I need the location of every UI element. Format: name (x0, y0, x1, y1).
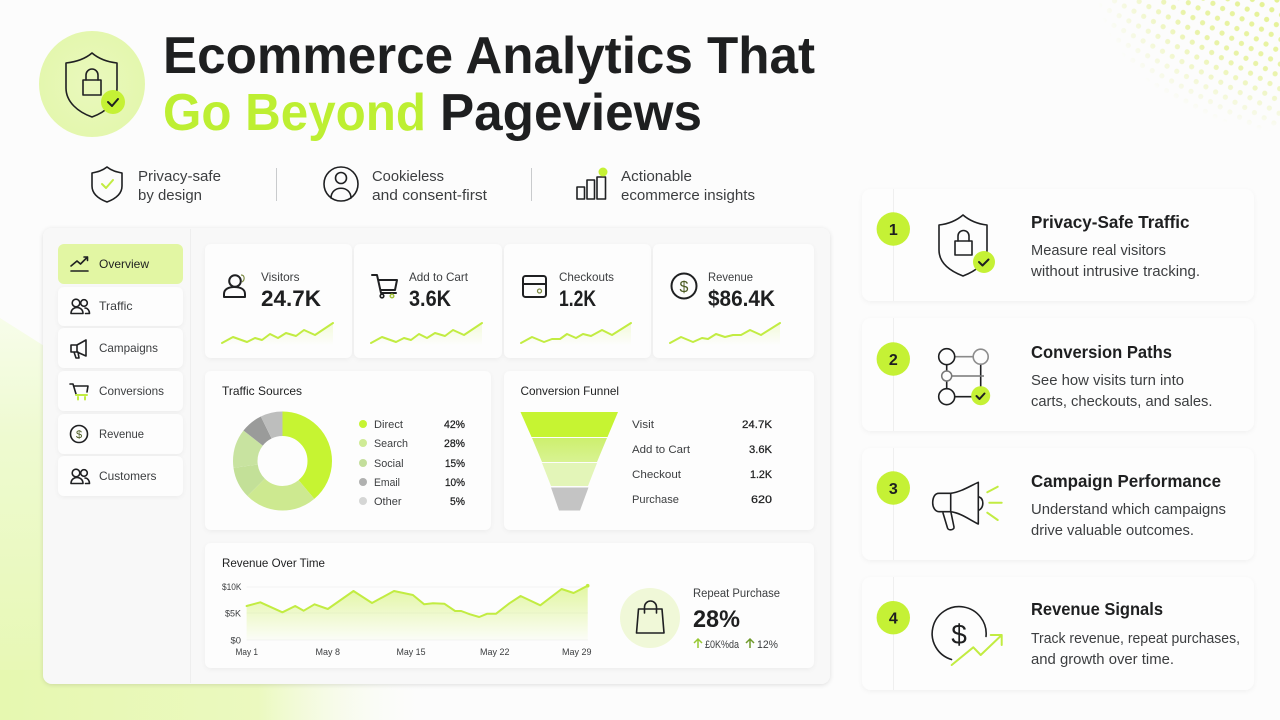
dashboard panel (43, 189, 1254, 690)
nav: revenue: $ (76, 429, 82, 441)
title: Go Beyond (163, 84, 426, 142)
donut legend: 10% (445, 477, 465, 489)
KPI card: revenue: Revenue (708, 270, 753, 284)
title: Ecommerce Analytics That (163, 27, 815, 85)
KPI card: visitors: 24.7K (261, 286, 321, 311)
panel: conversion funnel (504, 371, 814, 530)
header badge: shield with lock (39, 31, 145, 137)
funnel labels: Add to Cart (632, 444, 690, 456)
card 2: conversion paths: carts, checkouts, and sales. (1031, 394, 1212, 410)
KPI card: add to cart: 3.6K (409, 286, 451, 311)
funnel labels: Visit (632, 419, 654, 431)
nav: conversions (58, 371, 183, 411)
KPI card: visitors: Visitors (261, 270, 300, 284)
card 2: conversion paths: Conversion Paths (1031, 342, 1172, 362)
feature: actionable (577, 168, 755, 204)
card 4: revenue signals: and growth over time. (1031, 652, 1174, 668)
nav: overview (58, 244, 183, 284)
nav: revenue: Revenue (99, 427, 144, 441)
donut legend: 15% (445, 458, 465, 470)
KPI card: checkouts (504, 244, 651, 358)
KPI card: checkouts: Checkouts (559, 270, 614, 284)
card 1: privacy-safe traffic: without intrusive tracking. (1030, 264, 1200, 280)
funnel labels: 3.6K (749, 444, 773, 456)
KPI card: revenue (653, 244, 814, 358)
repeat purchase stat: Repeat Purchase (693, 588, 780, 600)
halftone dot pattern (1108, 0, 1280, 126)
nav: overview: Overview (99, 257, 149, 271)
repeat purchase stat: £0K%da (705, 639, 740, 651)
card 2: conversion paths: 2 (889, 352, 898, 369)
sidebar nav (58, 244, 183, 496)
funnel labels: 24.7K (742, 419, 773, 431)
area chart: May 29 (562, 647, 592, 658)
nav: campaigns: Campaigns (99, 341, 158, 355)
nav: conversions: Conversions (99, 384, 164, 398)
card 3: campaign performance: Understand which campaigns (1031, 502, 1226, 518)
feature: cookieless (324, 167, 488, 204)
area chart: $5K (225, 608, 242, 620)
nav: customers: Customers (99, 469, 156, 483)
feature: actionable: ecommerce insights (621, 187, 755, 204)
card 3: campaign performance (862, 448, 1254, 560)
card 4: revenue signals: Track revenue, repeat purchases, (1031, 631, 1240, 647)
donut legend: Other (374, 496, 402, 508)
card 4: revenue signals (862, 577, 1254, 690)
area chart: $0 (230, 636, 241, 646)
card 3: campaign performance: Campaign Performance (1031, 471, 1221, 491)
KPI card: add to cart: Add to Cart (409, 270, 469, 284)
card 1: privacy-safe traffic: Measure real visitors (1031, 243, 1166, 259)
panel: traffic sources (205, 371, 491, 530)
title (163, 27, 815, 142)
icon: revenue growth: $ (951, 619, 967, 650)
area chart: May 1 (236, 647, 258, 658)
donut legend: 42% (444, 419, 465, 431)
area chart (222, 582, 592, 658)
donut legend: Social (374, 458, 404, 470)
repeat purchase stat: 28% (693, 606, 740, 633)
feature: privacy-safe (92, 167, 221, 204)
card 1: privacy-safe traffic (862, 189, 1254, 301)
area chart: $10K (222, 582, 242, 593)
feature: cookieless: Cookieless (372, 168, 444, 185)
nav: campaigns (58, 328, 183, 368)
feature: actionable: Actionable (621, 168, 692, 185)
feature: cookieless: and consent-first (372, 187, 488, 204)
panel: revenue over time (205, 543, 814, 668)
card 4: revenue signals: 4 (889, 611, 898, 628)
donut legend (359, 419, 465, 508)
panel: revenue over time: Revenue Over Time (222, 556, 325, 570)
funnel labels: Checkout (632, 469, 681, 481)
funnel labels: 1.2K (750, 469, 773, 481)
donut legend: 5% (450, 496, 465, 508)
repeat purchase stat: 12% (757, 639, 778, 651)
icon: shield (939, 215, 995, 276)
nav: traffic: Traffic (99, 299, 132, 313)
card 2: conversion paths: See how visits turn into (1031, 373, 1184, 389)
card 1: privacy-safe traffic: 1 (889, 222, 898, 239)
icon: megaphone (933, 482, 1002, 530)
panel: traffic sources: Traffic Sources (222, 384, 302, 398)
funnel labels: 620 (751, 494, 772, 506)
KPI card: revenue: $86.4K (708, 286, 775, 311)
donut legend: 28% (444, 438, 465, 450)
area chart: May 15 (396, 647, 426, 658)
card 3: campaign performance: 3 (889, 481, 898, 498)
repeat purchase stat (620, 588, 780, 651)
card 1: privacy-safe traffic: Privacy-Safe Traffic (1031, 212, 1190, 232)
donut chart (245, 424, 320, 498)
funnel labels: Purchase (632, 494, 679, 506)
icon: revenue growth (932, 607, 1002, 665)
funnel chart (520, 412, 618, 510)
area chart: May 8 (316, 647, 340, 658)
title: Pageviews (440, 84, 702, 142)
panel: conversion funnel: Conversion Funnel (520, 384, 619, 398)
nav: revenue (58, 414, 183, 454)
KPI card: visitors (205, 244, 352, 358)
area chart: May 22 (480, 647, 510, 658)
KPI card: add to cart (354, 244, 502, 358)
nav: customers (58, 456, 183, 496)
card 3: campaign performance: drive valuable outcomes. (1031, 523, 1194, 539)
donut legend: Email (374, 477, 400, 489)
card 2: conversion paths (862, 318, 1254, 431)
donut legend: Direct (374, 419, 403, 431)
KPI card: checkouts: 1.2K (559, 286, 596, 311)
donut legend: Search (374, 438, 408, 450)
nav: traffic (58, 287, 183, 326)
card 4: revenue signals: Revenue Signals (1031, 599, 1163, 619)
KPI card: revenue: $ (680, 279, 689, 296)
feature strip (92, 167, 755, 204)
feature: privacy-safe: Privacy-safe (138, 168, 221, 185)
feature: privacy-safe: by design (138, 187, 202, 204)
icon: conversion paths (939, 349, 990, 405)
funnel labels (632, 419, 773, 506)
